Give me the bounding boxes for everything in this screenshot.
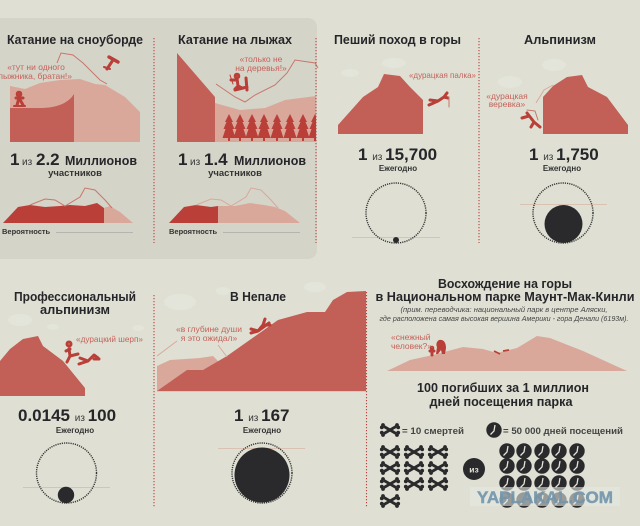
mountain: steep cliff xyxy=(177,53,215,142)
stat: skiing: 1.4 xyxy=(204,150,228,169)
route line xyxy=(216,60,318,102)
icon: falling climber xyxy=(522,110,540,127)
watermark: YAPLAKAL.COM xyxy=(477,488,613,507)
mini mountain: probability xyxy=(218,203,300,223)
stat: alpinism: 1 из 1,750 xyxy=(529,145,599,164)
stat: snowboarding: Миллионов xyxy=(65,153,137,168)
panel: highlighted snow sports xyxy=(0,18,317,259)
heading: Nepal: В Непале xyxy=(230,289,286,304)
legend: bones: = 10 смертей xyxy=(402,426,464,437)
translator note: (прим. переводчика: национальный парк в центре Аляски, xyxy=(400,306,608,314)
heading: skiing: Катание на лыжах xyxy=(178,32,293,47)
panel: skiing: на деревья!» xyxy=(235,63,287,73)
panel: snowboarding xyxy=(0,32,143,236)
mountain: Denali xyxy=(387,336,627,371)
quote: skiing: «только не xyxy=(240,54,283,64)
mountain: Nepal xyxy=(157,291,366,391)
stat: snowboarding: из xyxy=(22,157,33,168)
bones grid xyxy=(380,445,448,508)
stat: snowboarding: 1 xyxy=(10,150,19,169)
mini mountain: probability filled xyxy=(3,203,104,223)
quote: hiking: «дурацкая палка» xyxy=(409,70,476,80)
probability label: Вероятность xyxy=(169,227,218,236)
dotted dividers xyxy=(154,38,479,508)
stat label: Ежегодно xyxy=(543,164,581,173)
icon: climber on slope xyxy=(251,319,270,333)
stat: snowboarding: 2.2 xyxy=(36,150,60,169)
legend: clocks: = 50 000 дней посещений xyxy=(503,426,623,437)
panel: Nepal: я это ожидал» xyxy=(181,333,237,343)
stat label: Ежегодно xyxy=(56,426,94,435)
quote: Nepal: «в глубине души xyxy=(176,324,242,334)
panel: alpinism xyxy=(486,32,628,243)
probability circle: Nepal xyxy=(218,443,305,503)
panel: hiking xyxy=(334,32,476,243)
pointer lines xyxy=(157,341,227,357)
stat label: участников xyxy=(48,168,102,179)
icon: debris xyxy=(494,350,509,354)
icon: sherpa kicking xyxy=(66,342,78,362)
stat label: Ежегодно xyxy=(243,426,281,435)
legend: clocks xyxy=(486,422,623,438)
stat: Nepal: 1 из 167 xyxy=(234,406,290,425)
stat: skiing: из xyxy=(190,157,201,168)
panel: skiing xyxy=(169,32,322,236)
mountain: snowboarding slope xyxy=(10,79,140,142)
quote: professional: «дурацкий шерп» xyxy=(76,334,143,344)
heading: professional mountaineering: Профессиональный xyxy=(14,289,136,304)
panel: Nepal xyxy=(157,282,366,503)
stat: professional: 0.0145 из 100 xyxy=(18,406,116,425)
mini route line xyxy=(30,188,112,208)
mountain: far ridge xyxy=(157,356,219,391)
halfpipe xyxy=(10,94,74,142)
heading: alpinism: Альпинизм xyxy=(524,32,596,47)
panel: alpinism: веревка» xyxy=(489,99,526,109)
mountain: alpinism xyxy=(543,75,628,134)
mountain: back slope xyxy=(215,96,316,142)
heading: Denali: Восхождение на горы xyxy=(438,276,572,291)
stat: skiing: 1 xyxy=(178,150,187,169)
icon: small hiker xyxy=(430,347,434,355)
trees xyxy=(222,114,322,141)
icon: falling skier xyxy=(230,74,247,90)
panel: professional mountaineering: альпинизм xyxy=(40,302,110,317)
clouds xyxy=(498,59,566,88)
icon: skier on halfpipe xyxy=(14,92,25,106)
clouds xyxy=(341,58,406,77)
legend: bones xyxy=(380,423,464,437)
mountain: hiking xyxy=(338,74,423,134)
icon: falling hiker xyxy=(429,93,449,107)
quote: snowboarding: «тут ни одного xyxy=(7,62,65,72)
mini mountain: probability filled xyxy=(169,205,218,223)
stat: skiing: Миллионов xyxy=(234,153,306,168)
panel: professional mountaineering xyxy=(0,289,144,503)
panel: Denali: человек?» xyxy=(391,341,432,351)
quote: Denali: «снежный xyxy=(391,332,431,342)
mountain: professional xyxy=(0,336,85,396)
mini mountain: probability xyxy=(104,206,133,223)
quote: alpinism: «дурацкая xyxy=(486,91,528,101)
panel: Denali: в Национальном парке Маунт-Мак-Кинли xyxy=(376,289,634,304)
icon: yeti xyxy=(436,340,446,354)
probability label: Вероятность xyxy=(2,227,51,236)
stat label: участников xyxy=(208,168,262,179)
mini route line xyxy=(196,188,278,208)
stat label: Ежегодно xyxy=(379,164,417,173)
probability circle: alpinism xyxy=(520,183,607,243)
clouds xyxy=(8,314,144,331)
panel: Denali: где расположена самая высокая вершина Америки - гора Денали (6193м). xyxy=(380,315,629,323)
rope line xyxy=(536,85,553,103)
badge: из: из xyxy=(469,464,479,474)
panel: Denali: дней посещения парка xyxy=(430,394,573,409)
heading: hiking: Пеший поход в горы xyxy=(334,32,461,47)
stat: hiking: 1 из 15,700 xyxy=(358,145,437,164)
route line xyxy=(57,53,107,84)
clocks grid xyxy=(499,443,585,508)
icon: falling climber xyxy=(79,355,99,364)
heading: snowboarding: Катание на сноуборде xyxy=(7,32,143,47)
probability circle: hiking xyxy=(352,183,440,243)
panel: Denali xyxy=(376,276,634,508)
clouds xyxy=(164,282,326,310)
badge: из xyxy=(463,458,485,480)
stat heading: Denali: 100 погибших за 1 миллион xyxy=(417,380,589,395)
probability circle: professional xyxy=(23,443,110,503)
icon: snowboarder in air xyxy=(104,57,118,69)
panel: snowboarding: лыжника, братан!» xyxy=(0,71,72,81)
